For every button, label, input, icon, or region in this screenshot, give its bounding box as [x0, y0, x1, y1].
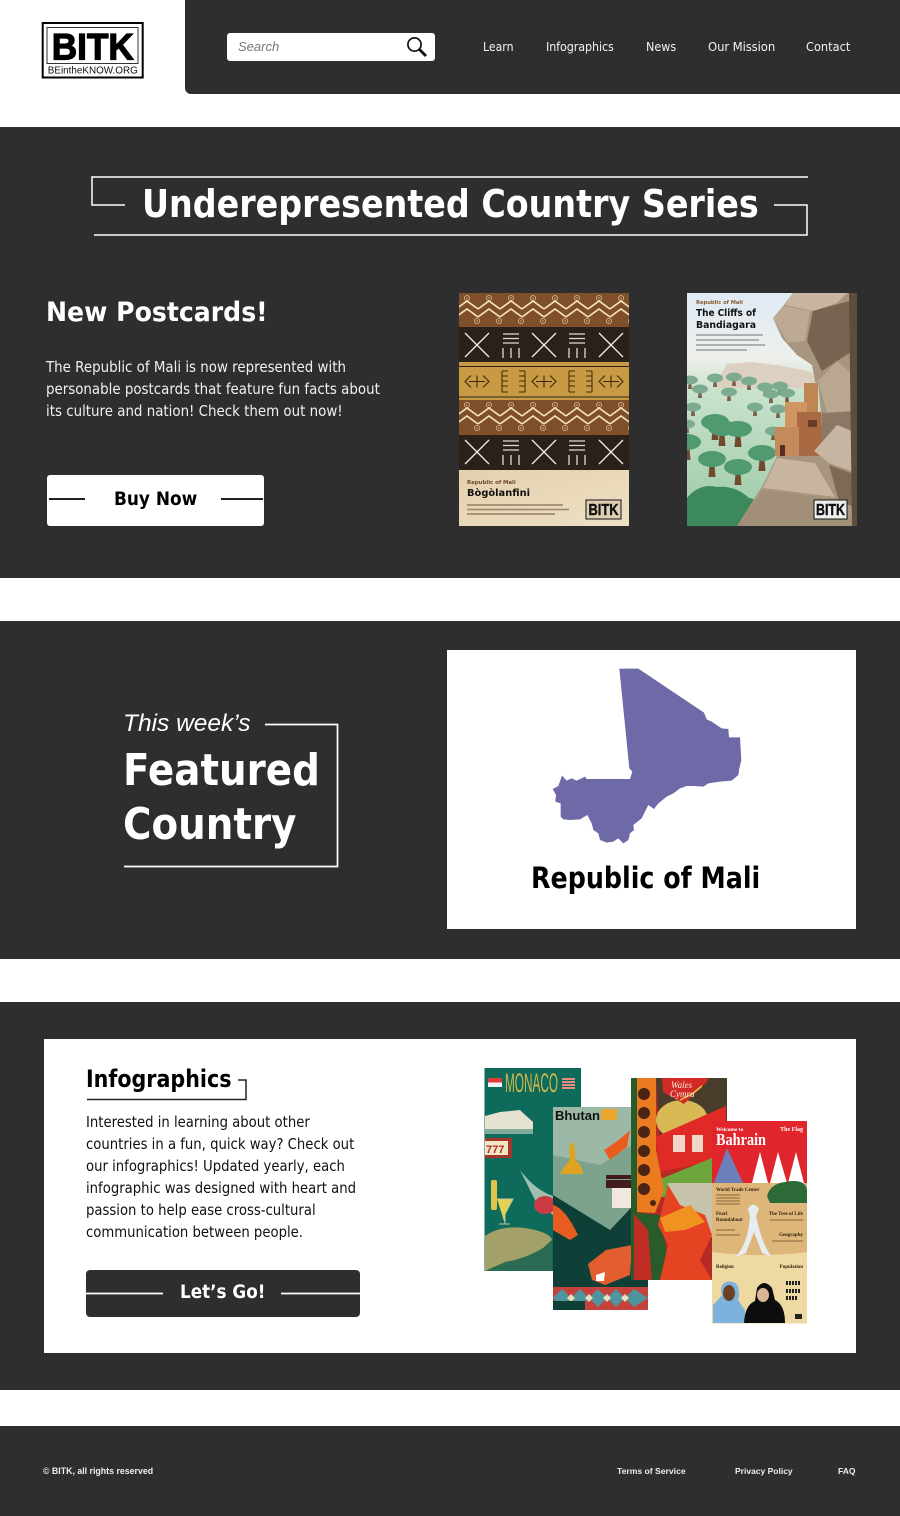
poster: bahrain: The Tree of Life [769, 1212, 804, 1217]
nav link: Contact: Contact [806, 40, 850, 54]
postcard logo: BITK [816, 502, 845, 519]
rock cliff [737, 293, 857, 526]
distant cliff [717, 362, 817, 388]
search box [227, 33, 435, 61]
panel: map card [447, 650, 856, 929]
copyright: © BITK, all rights reserved [43, 1466, 153, 1476]
postcard caption: Bògòlanfini [467, 488, 530, 499]
postcard heading: Republic of Mali [696, 300, 743, 306]
adobe village [775, 383, 823, 456]
button label: Buy Now [114, 488, 197, 510]
nav link: News: News [646, 40, 676, 54]
black band top [465, 333, 623, 358]
poster: bahrain [712, 1121, 807, 1324]
this week's label: This week’s [123, 710, 251, 737]
poster: wales: Cymru [670, 1089, 695, 1099]
poster: bahrain: Welcome to [716, 1127, 744, 1133]
title: Underepresented Country Series [142, 182, 759, 226]
nav link: Learn: Learn [483, 40, 514, 54]
postcard: cliffs of bandiagara [687, 293, 857, 526]
postcard: bogolanfini [459, 293, 629, 526]
infographics description [86, 1113, 356, 1241]
button lines [49, 498, 263, 500]
footer link: privacy: Privacy Policy [735, 1466, 793, 1476]
poster: bahrain: Bahrain [716, 1130, 766, 1149]
header logo: BEintheKNOW.ORG [48, 66, 138, 76]
button: let's go [86, 1270, 360, 1317]
footer link: faq: FAQ [838, 1466, 855, 1476]
postcard heading [696, 300, 765, 350]
panel: featured country [0, 621, 900, 959]
map of mali [552, 668, 742, 844]
poster: bahrain: Geography [779, 1233, 803, 1238]
postcards description [46, 358, 380, 420]
featured frame [124, 724, 338, 868]
brown band top [459, 293, 629, 327]
button label: Let’s Go! [180, 1281, 265, 1303]
nav link: Infographics: Infographics [546, 40, 614, 54]
infographics description: passion to help ease cross-cultural [86, 1201, 316, 1219]
postcards description: personable postcards that feature fun facts about [46, 380, 380, 398]
title frame [91, 176, 808, 236]
footer [0, 1426, 900, 1516]
poster: wales [631, 1078, 727, 1280]
button lines [86, 1292, 360, 1294]
search placeholder: Search [238, 39, 279, 54]
poster: bahrain: Religion [716, 1265, 734, 1270]
panel: underepresented country series [0, 127, 900, 578]
poster: bahrain: Roundabout [716, 1218, 743, 1223]
header logo [42, 22, 144, 78]
heading bracket [87, 1079, 247, 1100]
poster: bahrain: World Trade Center [716, 1188, 760, 1193]
poster: bahrain: Pearl [716, 1212, 728, 1217]
header logo: BITK [52, 26, 134, 68]
white card [44, 1039, 856, 1353]
poster: bhutan [553, 1107, 648, 1310]
poster: monaco [484, 1068, 581, 1271]
navigation bar [185, 0, 900, 94]
postcards description: The Republic of Mali is now represented with [46, 358, 346, 376]
postcard caption: Republic of Mali [467, 480, 516, 486]
infographics description: Interested in learning about other [86, 1113, 310, 1131]
poster: bahrain: The Flag [780, 1127, 803, 1133]
footer link: terms: Terms of Service [617, 1466, 686, 1476]
infographic collage [484, 1068, 807, 1324]
icon: magnifier [407, 37, 427, 57]
heading: infographics: Infographics [86, 1065, 231, 1093]
forest [673, 372, 795, 526]
infographics description: communication between people. [86, 1223, 303, 1241]
heading: new postcards: New Postcards! [46, 297, 268, 328]
heading: featured country: Country [122, 798, 296, 850]
poster: wales: Wales [671, 1080, 693, 1090]
infographics description: infographic was designed with heart and [86, 1179, 356, 1197]
button: buy now [47, 475, 264, 526]
poster: bhutan: Bhutan [555, 1108, 600, 1123]
brown band lower [459, 400, 629, 435]
postcard caption: BITK [588, 502, 619, 519]
heading: featured country [122, 745, 319, 850]
heading: featured country: Featured [122, 745, 319, 796]
poster: monaco: 777 [486, 1144, 504, 1156]
postcard caption [459, 470, 629, 526]
postcard heading: The Cliffs of [696, 308, 757, 319]
postcards description: its culture and nation! Check them out now! [46, 402, 343, 420]
poster: bahrain: Population [780, 1265, 803, 1270]
infographics description: our infographics! Updated yearly, each [86, 1157, 345, 1175]
black band lower [465, 440, 623, 465]
postcard heading: Bandiagara [696, 320, 756, 331]
country name: Republic of Mali [531, 860, 760, 894]
poster: monaco: MONACO [505, 1068, 558, 1098]
nav link: Our Mission: Our Mission [708, 40, 775, 54]
gold band [459, 362, 629, 400]
infographics description: countries in a fun, quick way? Check out [86, 1135, 354, 1153]
panel: infographics section [0, 1002, 900, 1390]
